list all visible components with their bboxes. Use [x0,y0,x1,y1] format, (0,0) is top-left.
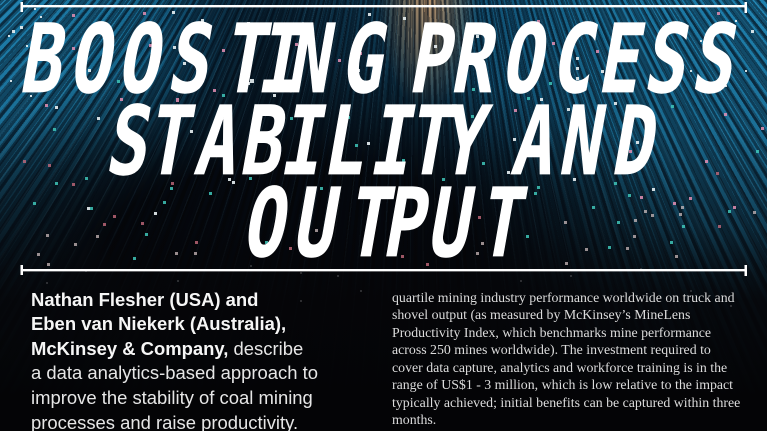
body text column: shovel output (as measured by McKinsey’s MineLens [392,307,690,322]
body text column: range of US$1 - 3 million, which is low relative to the impact [392,377,733,392]
title line 3: OUTPUT [237,167,534,279]
body text column: cover data capture, analytics and workforce training is in the [392,360,727,374]
rule: top [20,2,747,13]
standfirst: authors and summary: McKinsey & Company, describe [31,338,303,359]
body text column: months. [392,412,436,427]
body text column: quartile mining industry performance worldwide on truck and [392,290,735,304]
body text column: typically achieved; initial benefits can be captured within three [392,394,740,410]
body text column [392,290,740,427]
body text column: across 250 mines worldwide). The investment required to [392,342,711,357]
rule: bottom [20,265,747,276]
standfirst: authors and summary [31,288,318,431]
title line 2: STABILITY AND [100,85,667,197]
body text column: Productivity Index, which benchmarks mine performance [392,324,711,340]
standfirst: authors and summary: Eben van Niekerk (Australia), [31,313,286,334]
standfirst: authors and summary: a data analytics-based approach to [31,362,318,383]
title line 1: BOOSTING PROCESS [14,3,747,115]
standfirst: authors and summary: Nathan Flesher (USA) and [31,288,258,310]
standfirst: authors and summary: improve the stability of coal mining [31,387,313,408]
